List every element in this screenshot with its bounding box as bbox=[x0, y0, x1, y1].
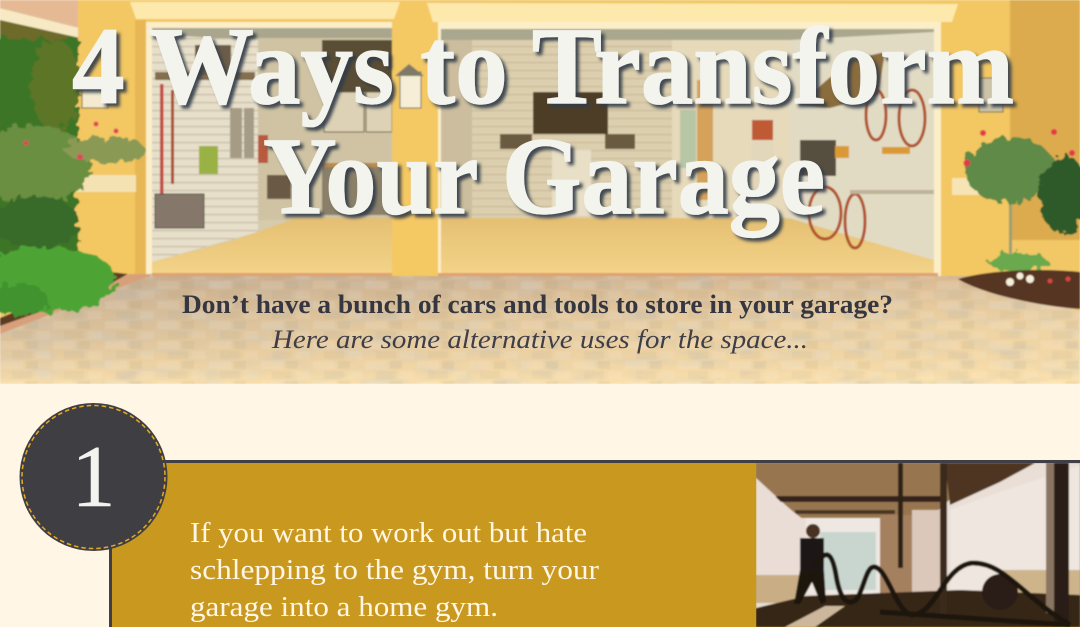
mulch bed right bbox=[958, 270, 1080, 309]
number badge 1 bbox=[20, 403, 168, 551]
panel fill bbox=[110, 462, 1080, 627]
panel border bbox=[110, 462, 1080, 627]
title: 4 Ways to Transform bbox=[72, 5, 1014, 127]
title bbox=[72, 5, 1014, 237]
number badge 1: 1 bbox=[72, 429, 116, 526]
neighbouring roof bbox=[0, 0, 80, 60]
gym photo bbox=[756, 463, 1080, 627]
right garage door opening bbox=[438, 22, 941, 278]
centre pillar with lamp bbox=[391, 64, 424, 133]
mulch bed left bbox=[0, 272, 128, 326]
step text: schlepping to the gym, turn your bbox=[190, 555, 600, 586]
subtitle: Don’t have a bunch of cars and tools to store in your garage? bbox=[182, 289, 893, 319]
left shrubs bbox=[0, 38, 145, 316]
right wall bbox=[951, 0, 1080, 240]
italic tagline: Here are some alternative uses for the space... bbox=[271, 324, 808, 354]
panel: step 1 bbox=[110, 462, 1080, 627]
left garage door opening bbox=[146, 22, 392, 278]
left pillar bbox=[72, 0, 146, 278]
step text bbox=[190, 518, 600, 623]
right rose bush bbox=[964, 129, 1080, 271]
title: Your Garage bbox=[263, 115, 825, 237]
hero photo: garage bbox=[0, 0, 1080, 384]
brick driveway bbox=[0, 276, 1080, 384]
step text: garage into a home gym. bbox=[190, 592, 498, 623]
wall lamp left bbox=[80, 90, 110, 110]
trim above doors bbox=[130, 2, 958, 22]
step text: If you want to work out but hate bbox=[190, 518, 587, 549]
flowers left bbox=[24, 122, 118, 160]
door sill bbox=[0, 273, 938, 334]
